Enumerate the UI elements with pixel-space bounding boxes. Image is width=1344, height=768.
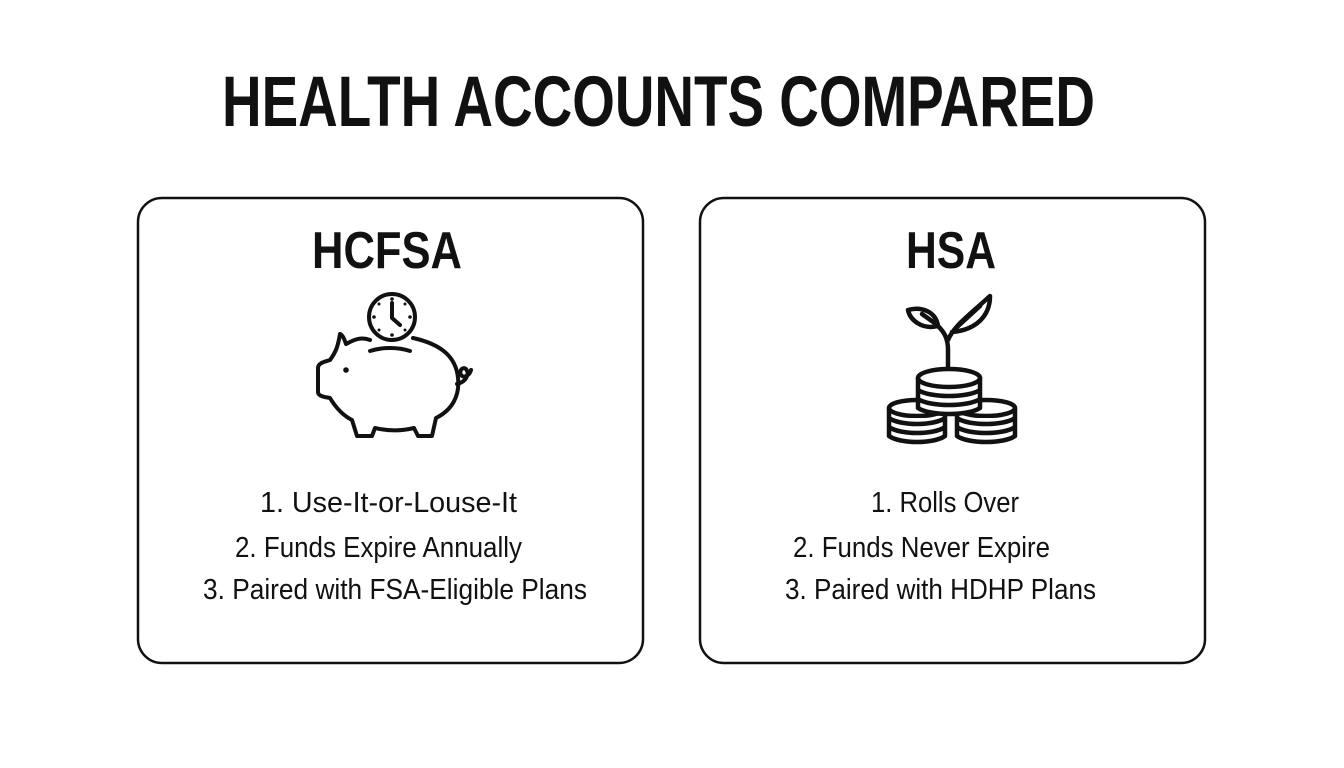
list: HSA features: 1. Rolls Over [871,487,1019,519]
list: HCFSA features: 3. Paired with FSA-Eligible Plans [203,574,587,606]
list: HCFSA features: 1. Use-It-or-Louse-It [260,487,517,519]
list: HCFSA features: 2. Funds Expire Annually [235,532,522,564]
icon: plant growing from coins [889,296,1015,442]
list: HSA features: 2. Funds Never Expire [793,532,1050,564]
list: HSA features [785,487,1096,606]
heading: HCFSA: HCFSA [312,222,462,280]
list: HCFSA features [203,487,587,606]
panel: HSA [700,198,1205,663]
list: HSA features: 3. Paired with HDHP Plans [785,574,1096,606]
heading: HSA: HSA [906,222,996,280]
icon: piggy bank with clock [318,294,471,436]
panel: HCFSA [138,198,643,663]
title: HEALTH ACCOUNTS COMPARED [222,63,1095,142]
